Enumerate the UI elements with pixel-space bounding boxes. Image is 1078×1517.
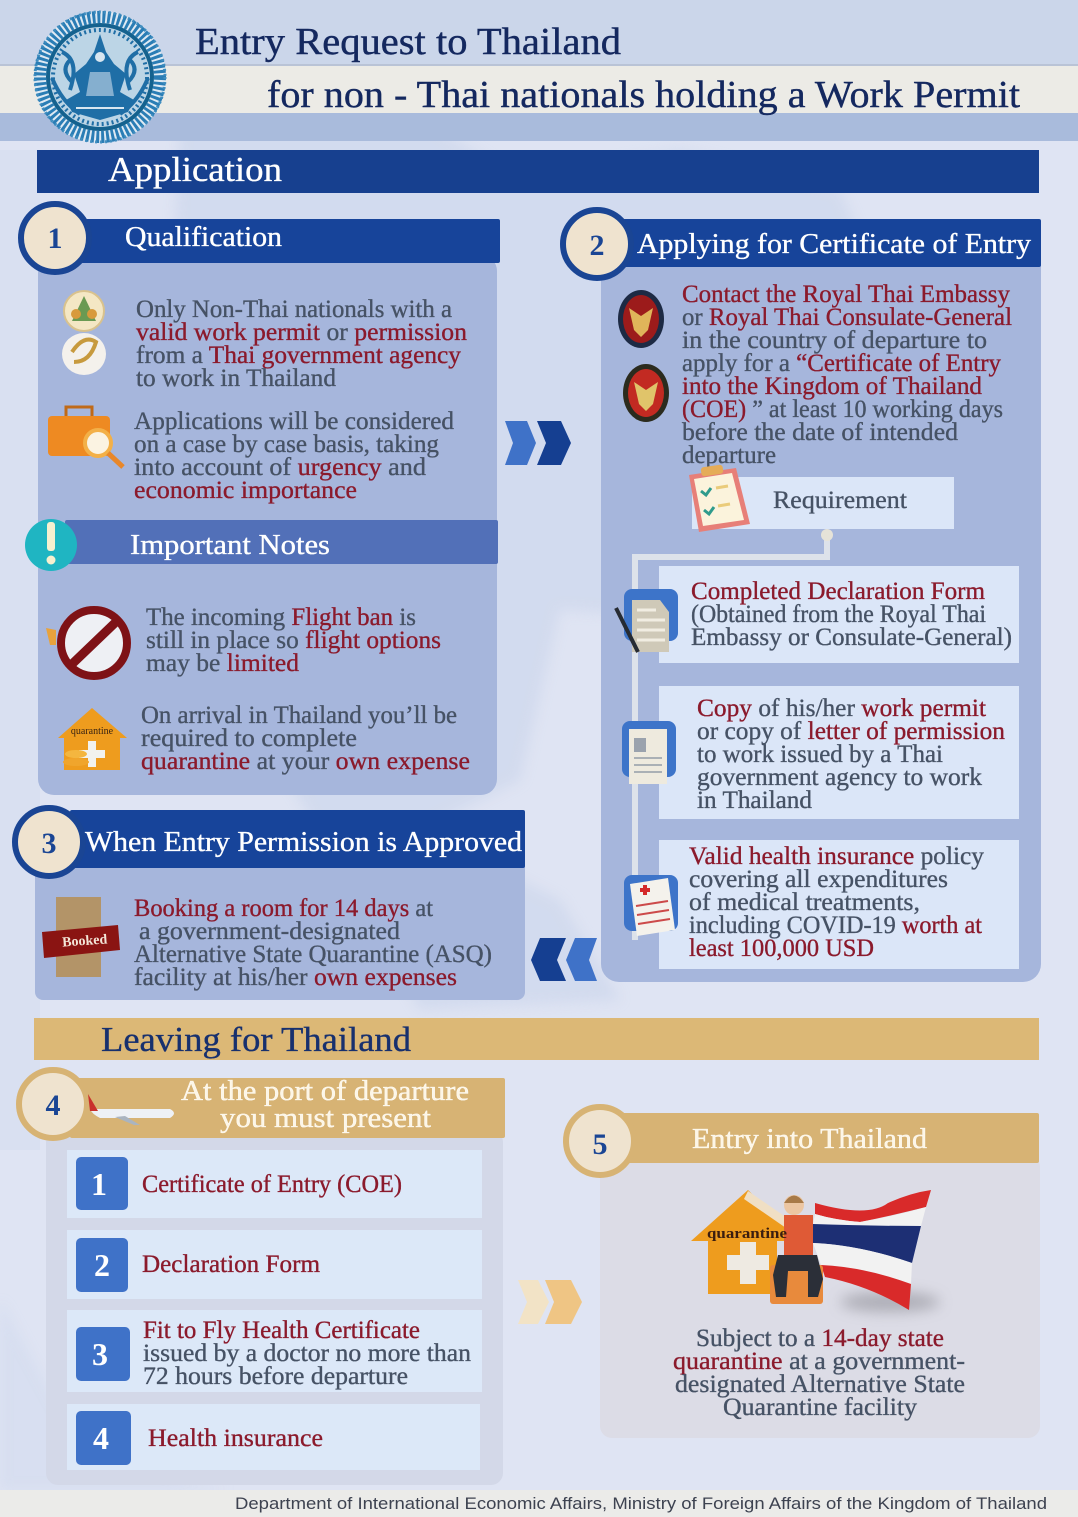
list item 1: certificate of entry: Certificate of Entry (COE) [142, 1171, 402, 1198]
step 5 header: 5 [592, 1128, 608, 1161]
icon: medical document [624, 875, 678, 936]
text: book ASQ room [134, 895, 492, 991]
step 3 header [15, 808, 525, 876]
text: quarantine on arrival: required to complete [141, 725, 357, 752]
icon: quarantine house: quarantine [71, 726, 114, 737]
requirement: health insurance: Valid health insurance policy [689, 843, 984, 870]
text: case by case: Applications will be considered [134, 408, 454, 435]
important notes header [25, 519, 498, 571]
text: contact embassy: departure [682, 442, 776, 469]
panel: at the port of departure [19, 1070, 505, 1485]
illustration: quarantine house, traveller and Thai flag [691, 1190, 940, 1312]
requirement box [692, 477, 954, 529]
list item 1: certificate of entry: 1 [91, 1166, 107, 1202]
important notes header: Important Notes [130, 530, 330, 561]
text: agency line: from a Thai government agency [136, 342, 462, 369]
text: flight ban: The incoming Flight ban is [146, 604, 416, 631]
list item 4: health insurance: 4 [93, 1420, 109, 1456]
step 4 header: At the port of departure [181, 1076, 469, 1107]
panel: qualification and important notes [21, 204, 500, 795]
panel: entry into Thailand [566, 1107, 1040, 1438]
list item 2: declaration form: 2 [94, 1247, 110, 1283]
requirement: work permit copy: in Thailand [697, 787, 812, 814]
step 1 header [21, 204, 500, 272]
text: book ASQ room: a government-designated [139, 918, 401, 945]
requirement: work permit copy: or copy of letter of permission [697, 718, 1005, 745]
text: contact embassy: apply for a “Certificate of Entry [682, 350, 1001, 377]
text: quarantine on arrival: quarantine at your own expense [141, 748, 470, 775]
list item 1: certificate of entry [67, 1150, 482, 1218]
icon: briefcase with magnifier [48, 407, 123, 467]
title [195, 21, 1020, 116]
list item 2: declaration form: Declaration Form [142, 1251, 321, 1278]
list item 4: health insurance: Health insurance [148, 1425, 323, 1452]
icon: form and pen [616, 589, 678, 652]
title: Entry Request to Thailand [195, 21, 621, 63]
step 4 header: 4 [46, 1089, 60, 1122]
requirement: health insurance: including COVID-19 worth at [689, 912, 982, 939]
arrow: step 2 to step 3 [531, 938, 597, 981]
step 4 header: you must present [220, 1103, 431, 1134]
icon: copied document [622, 721, 676, 784]
requirement: declaration form: (Obtained from the Royal Thai [691, 601, 986, 628]
text: contact embassy: into the Kingdom of Thailand [682, 373, 983, 400]
step 5 header: Entry into Thailand [692, 1124, 927, 1155]
text: case by case: on a case by case basis, taking [134, 431, 439, 458]
list item 2: declaration form [67, 1230, 482, 1299]
step 5 header [566, 1107, 1039, 1175]
list item 3: fit to fly certificate: 72 hours before departure [143, 1363, 408, 1390]
icon: quarantine house [58, 708, 127, 770]
text: flight ban: still in place so flight options [146, 627, 441, 654]
icon: booked door: Booked [62, 932, 108, 951]
text: quarantine on arrival: On arrival in Thailand you’ll be [141, 702, 457, 729]
arrow: step 1 to step 2 [505, 421, 571, 465]
text: case by case [134, 408, 454, 504]
list item 3: fit to fly certificate [67, 1310, 482, 1392]
requirement: declaration form: Completed Declaration Form [691, 578, 986, 605]
step 2 header: Applying for Certificate of Entry [637, 229, 1031, 260]
icon: embassy emblems [618, 290, 669, 422]
requirement box: Requirement [773, 487, 907, 514]
text: book ASQ room: Alternative State Quarantine (ASQ) [134, 941, 492, 968]
list item 3: fit to fly certificate: 3 [92, 1336, 108, 1372]
header band [0, 0, 1078, 141]
illustration: quarantine house, traveller and Thai flag: quarantine [707, 1226, 787, 1242]
text: quarantine on arrival [141, 702, 470, 775]
icon: ministry seal [34, 11, 166, 143]
list item 4: health insurance [67, 1404, 480, 1470]
icon: flight ban [46, 610, 127, 676]
step 3 header: 3 [42, 827, 56, 860]
step 4 header [19, 1070, 505, 1138]
text: 14-day state quarantine: designated Alternative State [675, 1371, 965, 1398]
requirement: declaration form [659, 566, 1019, 663]
panel: when entry permission is approved [15, 808, 525, 1000]
text: book ASQ room: Booking a room for 14 days at [134, 895, 433, 922]
text: case by case: into account of urgency and [134, 454, 427, 481]
text: work in Thailand: to work in Thailand [136, 365, 336, 392]
requirement: health insurance: covering all expenditures [689, 866, 948, 893]
text: 14-day state quarantine: Subject to a 14-day state [696, 1325, 944, 1352]
requirement: health insurance [659, 840, 1019, 969]
requirement connector line [635, 529, 833, 940]
icon: agency emblems [62, 291, 106, 375]
step 2 header: 2 [590, 229, 604, 262]
requirement: health insurance: least 100,000 USD [689, 935, 874, 962]
text: contact embassy [682, 281, 1012, 469]
text: case by case: economic importance [134, 477, 357, 504]
step 3 header: When Entry Permission is Approved [85, 827, 522, 858]
step 1 header: 1 [48, 222, 62, 255]
icon: airplane [88, 1094, 174, 1125]
requirement: work permit copy: Copy of his/her work permit [697, 695, 986, 722]
text: 14-day state quarantine: Quarantine facility [723, 1394, 918, 1421]
panel: applying for certificate of entry [563, 210, 1041, 982]
requirement: work permit copy: government agency to work [697, 764, 983, 791]
text: contact embassy: in the country of departure to [682, 327, 987, 354]
text: flight ban: may be limited [146, 650, 300, 677]
arrow: step 4 to step 5 [518, 1280, 582, 1324]
text: contact embassy: Contact the Royal Thai Embassy [682, 281, 1010, 308]
requirement: health insurance: of medical treatments, [689, 889, 920, 916]
text: contact embassy: before the date of intended [682, 419, 959, 446]
step 1 header: Qualification [125, 222, 282, 253]
requirement: work permit copy [659, 686, 1019, 819]
text: work permit line: valid work permit or permission [136, 319, 468, 346]
footer: Department of International Economic Affairs, Ministry of Foreign Affairs of the Kingdom of Thailand [235, 1494, 1047, 1513]
requirement: work permit copy: to work issued by a Thai [697, 741, 943, 768]
text: book ASQ room: facility at his/her own expenses [134, 964, 457, 991]
footer [0, 1490, 1078, 1517]
icon: clipboard checklist [689, 465, 750, 532]
section heading: Application: Application [108, 150, 282, 189]
title: for non - Thai nationals holding a Work Permit [267, 74, 1020, 116]
icon: booked door [42, 897, 120, 977]
text: 14-day state quarantine: quarantine at a government- [673, 1348, 965, 1375]
requirement: declaration form: Embassy or Consulate-General) [691, 624, 1012, 651]
text: flight ban [146, 604, 441, 677]
list item 3: fit to fly certificate: Fit to Fly Health Certificate [143, 1317, 420, 1344]
text: contact embassy: (COE) ” at least 10 working days [682, 396, 1003, 423]
text: contact embassy: or Royal Thai Consulate-General [682, 304, 1012, 331]
section heading: Application [37, 150, 1039, 193]
step 2 header [563, 210, 1041, 278]
list item 3: fit to fly certificate: issued by a doctor no more than [143, 1340, 472, 1367]
text: 14-day state quarantine [673, 1325, 965, 1421]
section heading: Leaving for Thailand: Leaving for Thailand [101, 1020, 412, 1059]
section heading: Leaving for Thailand [34, 1018, 1039, 1060]
text: eligibility: Only Non-Thai nationals with a [136, 296, 452, 323]
